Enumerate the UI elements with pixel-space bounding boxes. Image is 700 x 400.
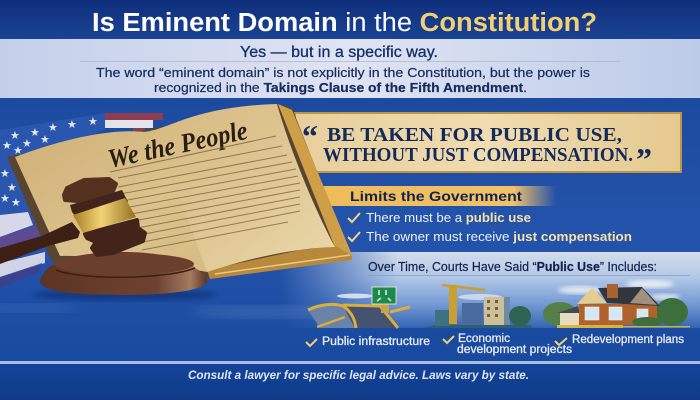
illustration: open book [7,104,352,279]
illustration: road and highway sign [308,287,410,328]
limits heading [320,186,556,206]
quote text: “ [302,118,318,154]
document text lines [110,136,300,250]
check 1: There must be a public use [366,210,531,225]
icon: flag stars: ★ [30,127,40,139]
icon: flag stars: ★ [7,182,17,194]
icon: flag stars: ★ [48,122,58,134]
item: economic development [443,333,572,356]
item: redevelopment plans: Redevelopment plans [572,334,684,346]
header bar [0,0,700,39]
quote panel [295,113,681,177]
limits heading: Limits the Government [350,188,522,204]
quote text: ” [636,141,652,177]
icon: flag stars: ★ [11,197,21,209]
intro band [0,39,700,98]
quote text [302,118,652,177]
crane [449,285,457,324]
icon: flag stars: ★ [22,138,32,150]
intro text: The word “eminent domain” is not explicitly in the Constitution, but the power is [96,66,590,80]
item: public infrastructure: Public infrastructure [322,336,430,348]
disclaimer: Consult a lawyer for specific legal advice. Laws vary by state. [188,370,529,382]
icon: flag stars: ★ [40,134,50,146]
illustration: gavel and sound block [0,179,217,301]
block shadow [33,289,217,301]
highway sign [381,303,389,313]
public use panel background [0,252,700,328]
quote text: BE TAKEN FOR PUBLIC USE, [327,124,622,146]
public use checklist [306,333,684,356]
gavel handle [0,222,80,264]
sound block [40,252,207,295]
item: economic development: Economic [458,333,510,345]
intro text [96,66,590,95]
gavel head [64,179,145,255]
road deck [343,306,398,328]
page edges [278,104,352,255]
illustration: house [543,284,690,328]
icon: flag stars: ★ [13,145,23,157]
document heading: We the People [105,115,250,174]
left page [15,131,207,272]
illustration: American flag [0,113,163,288]
icon: flag stars: ★ [67,119,77,131]
icon: flag stars: ★ [0,168,10,180]
background: main blue area [0,98,700,363]
book cover [7,104,352,279]
subheading: Yes — but in a specific way. [240,44,438,61]
bridge underside [308,304,355,328]
footer [0,361,700,400]
limits checklist [348,210,632,244]
icon: flag stars: ★ [2,140,12,152]
right page [143,104,335,272]
icon: flag stars: ★ [88,116,98,128]
title: Is Eminent Domain in the Constitution? [92,9,597,37]
quote text: WITHOUT JUST COMPENSATION. [323,144,633,166]
illustration: crane and buildings [423,285,533,328]
intro text: recognized in the Takings Clause of the Fifth Amendment . [154,81,527,95]
public use heading: Over Time, Courts Have Said “Public Use” Includes: [368,259,657,274]
icon: flag stars: ★ [10,130,20,142]
check 2: The owner must receive just compensation [366,229,632,244]
item: economic development: development projects [457,344,572,356]
icon: flag stars: ★ [0,193,10,205]
